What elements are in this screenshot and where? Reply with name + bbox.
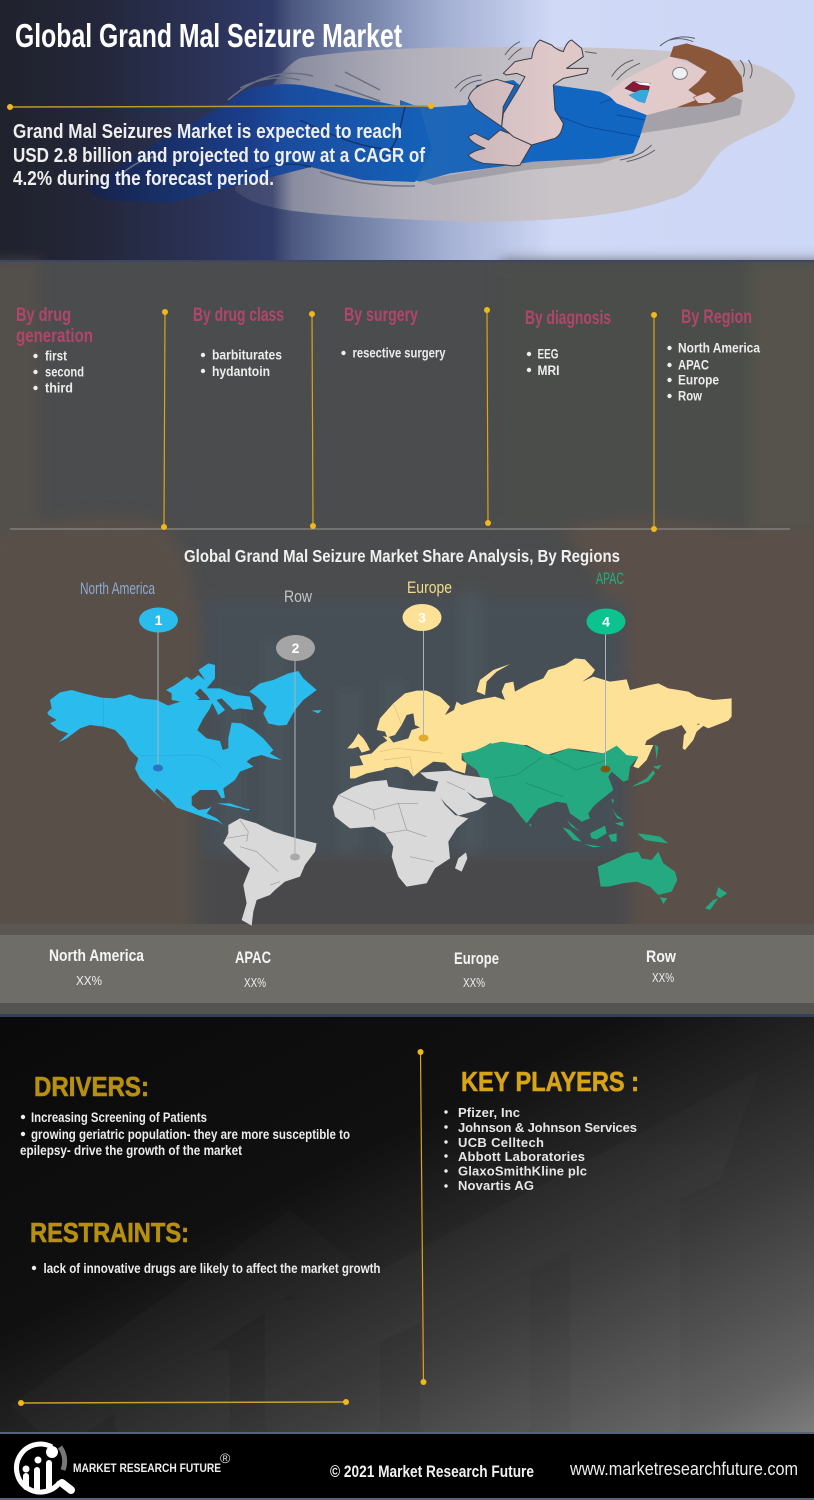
vertical divider with dots (418, 1049, 426, 1385)
share strip: North America (49, 947, 145, 965)
pin 3: Europe: 3 (418, 610, 426, 626)
pin 1: North America: North America (80, 579, 155, 598)
panel: segment by drug generation: generation (16, 326, 93, 347)
pin 2: Row: Row (284, 587, 313, 606)
panel: segment by drug class (193, 305, 284, 379)
key players list (444, 1105, 637, 1193)
panel: drivers, restraints and key players (0, 1017, 814, 1450)
share strip: Europe (454, 950, 499, 968)
share strip: XX% (244, 975, 266, 990)
illustration: legs under the dark overlay (88, 72, 432, 203)
panel: segment by region (667, 307, 760, 404)
drivers text: epilepsy- drive the growth of the market (20, 1143, 242, 1158)
summary text: USD 2.8 billion and projected to grow at a CAGR of (13, 145, 425, 167)
panel: segment by drug generation: second (45, 364, 84, 380)
key players list: GlaxoSmithKline plc (458, 1164, 587, 1178)
region: Rest of World (223, 771, 493, 926)
registered mark: ® (220, 1450, 231, 1466)
summary text: Grand Mal Seizures Market is expected to reach (13, 121, 402, 143)
panel: hero banner (0, 0, 814, 261)
drivers text: Increasing Screening of Patients (31, 1110, 207, 1125)
segment dividers (10, 307, 790, 532)
illustration: person having a seizure (235, 37, 795, 222)
panel: segment by diagnosis: By diagnosis (525, 308, 611, 329)
brand name: MARKET RESEARCH FUTURE (73, 1463, 221, 1475)
panel: segment by region: Row (678, 388, 702, 404)
map heading: Global Grand Mal Seizure Market Share Analysis, By Regions (184, 546, 620, 566)
panel: segment by region: Europe (678, 372, 719, 388)
copyright: © 2021 Market Research Future (330, 1462, 534, 1481)
panel: segment by surgery: resective surgery (352, 346, 446, 360)
drivers text: growing geriatric population- they are more susceptible to (31, 1127, 350, 1142)
pin 1: North America: 1 (155, 612, 163, 628)
share strip: XX% (463, 975, 485, 990)
key players list: Novartis AG (458, 1178, 534, 1193)
panel: segment by drug class: barbiturates (212, 348, 282, 362)
panel: segment by surgery: By surgery (344, 305, 418, 326)
panel: segment by region: By Region (681, 307, 752, 328)
horizontal divider with dots (18, 1399, 349, 1406)
pin 1: North America (80, 579, 178, 772)
key players list: Abbott Laboratories (458, 1149, 585, 1164)
pin 4: APAC: APAC (596, 569, 624, 588)
restraints heading: RESTRAINTS: (30, 1217, 189, 1248)
drivers heading: DRIVERS: (34, 1071, 149, 1102)
pin 2: Row (276, 587, 315, 860)
divider line with dots (7, 103, 434, 110)
summary text: 4.2% during the forecast period. (13, 168, 274, 190)
panel: segment by diagnosis (525, 308, 611, 378)
panel: segment by drug generation: third (45, 380, 73, 396)
panel: segment by surgery (341, 305, 446, 360)
pin 3: Europe (402, 578, 452, 742)
panel: segment by drug generation: first (45, 348, 67, 364)
key players list: Johnson & Johnson Services (458, 1120, 637, 1135)
world map (47, 569, 732, 926)
share strip (49, 947, 676, 990)
share strip: XX% (76, 973, 102, 988)
panel: segment by drug generation: By drug (16, 305, 71, 326)
region: North America (47, 663, 322, 825)
pin 4: APAC (586, 569, 626, 772)
panel: segmentation and map background (0, 260, 814, 1017)
panel: segment by region: APAC (678, 358, 709, 372)
panel: segment by diagnosis: EEG (538, 346, 558, 362)
share strip: Row (646, 948, 676, 966)
panel: segment by drug class: hydantoin (212, 364, 270, 379)
share strip: APAC (235, 949, 271, 967)
pin 3: Europe: Europe (407, 578, 452, 597)
key players heading: KEY PLAYERS : (461, 1066, 639, 1097)
drivers text (20, 1110, 350, 1158)
key players list: Pfizer, Inc (458, 1105, 520, 1120)
panel: segment by region: North America (678, 340, 760, 356)
restraints text: lack of innovative drugs are likely to affect the market growth (44, 1261, 380, 1276)
summary text (13, 121, 425, 190)
title: Global Grand Mal Seizure Market (15, 17, 402, 54)
key players list: UCB Celltech (458, 1135, 544, 1150)
share strip: XX% (652, 970, 674, 985)
panel: segment by drug generation (16, 305, 93, 396)
panel: segment by diagnosis: MRI (538, 363, 560, 378)
region: Europe and Russia (347, 658, 732, 778)
region: APAC (462, 742, 727, 910)
panel: segment by drug class: By drug class (193, 305, 284, 326)
pin 2: Row: 2 (292, 640, 300, 656)
footer (0, 1432, 814, 1500)
logo (16, 1444, 71, 1492)
pin 4: APAC: 4 (602, 614, 610, 630)
